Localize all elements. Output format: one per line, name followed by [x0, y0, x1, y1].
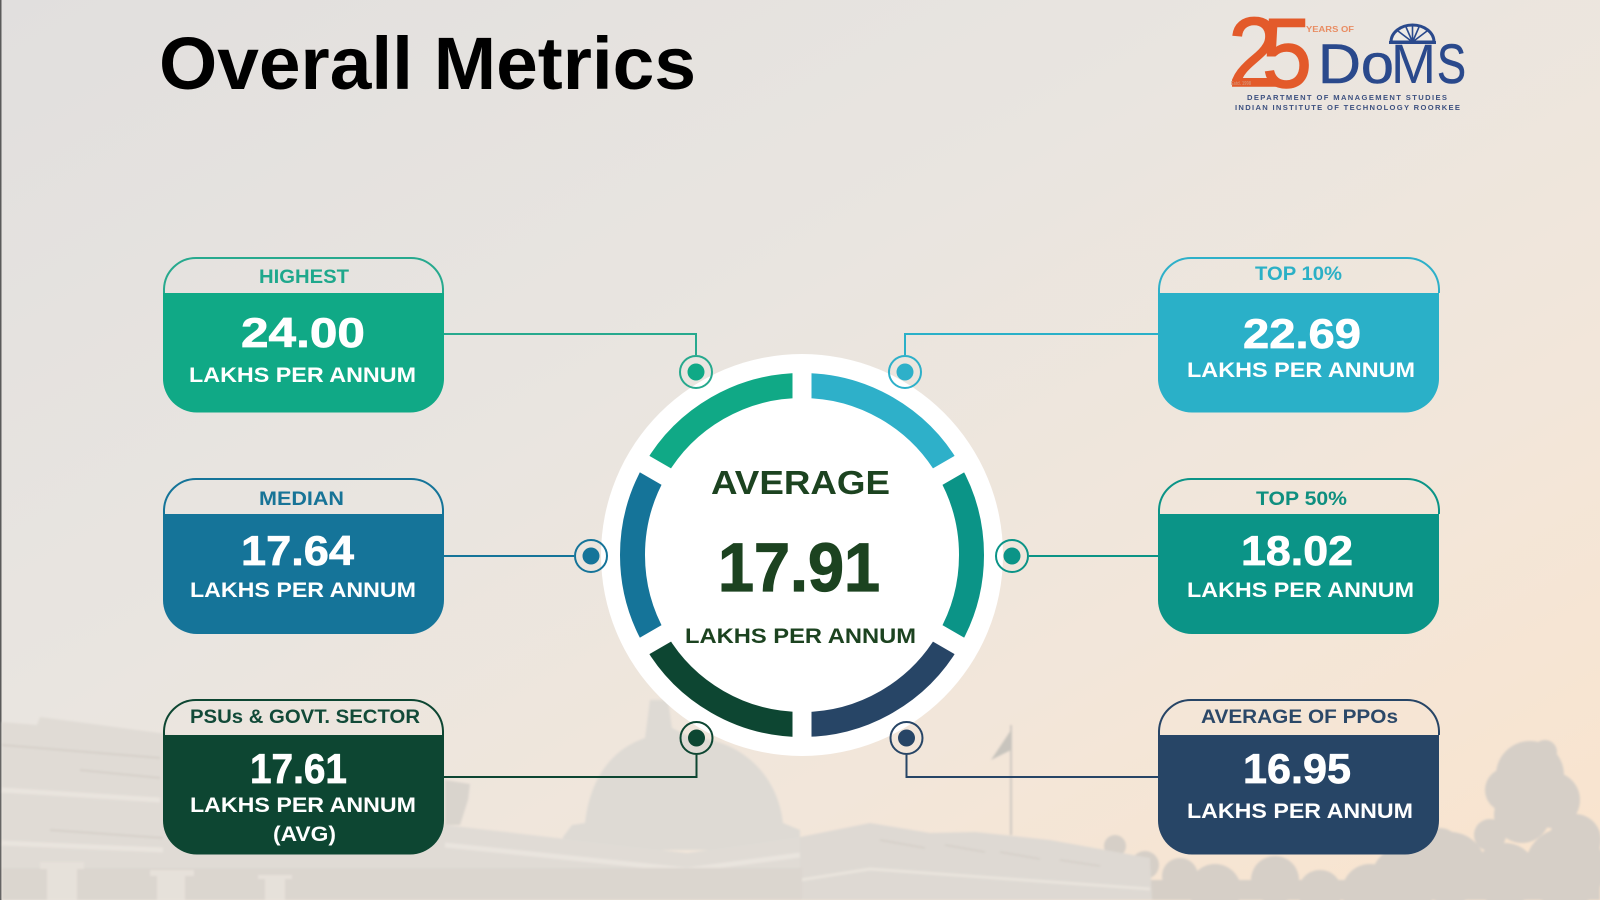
logo: 25 years of DoMS: M [1391, 32, 1436, 95]
logo: 25 years of DoMS: 2 [1228, 0, 1280, 107]
connector: PPOs [906, 755, 1158, 777]
connector: top 50% [1029, 555, 1158, 557]
unit: LAKHS PER ANNUM [1187, 579, 1414, 602]
background photo: institute building, flag and trees [2, 700, 1600, 900]
heading: PSUs & GOVT. SECTOR [190, 707, 420, 728]
logo: 25 years of DoMS: YEARS OF [1306, 25, 1354, 34]
title: Overall Metrics [159, 22, 696, 105]
segmented ring [632, 365, 972, 745]
central circle [601, 354, 1003, 756]
average value: 17.91 [718, 529, 880, 606]
dome [563, 700, 800, 850]
building right wing [800, 823, 1152, 900]
connector: PSUs [444, 755, 696, 777]
heading: MEDIAN [259, 489, 344, 510]
building left wing [2, 717, 800, 900]
panel: median [163, 479, 444, 634]
logo: 25 years of DoMS: S [1437, 32, 1466, 95]
panel: top 10% [1158, 258, 1439, 412]
node: highest [680, 356, 712, 388]
node: median [575, 540, 607, 572]
heading: AVERAGE OF PPOs [1201, 707, 1398, 728]
node: PPOs [890, 722, 922, 754]
value: 16.95 [1243, 745, 1351, 792]
value: 18.02 [1241, 527, 1353, 574]
panel: highest [163, 258, 444, 413]
unit: LAKHS PER ANNUM [189, 364, 416, 387]
average label: AVERAGE [711, 464, 890, 501]
heading: TOP 10% [1255, 264, 1342, 285]
node: top 50% [996, 540, 1028, 572]
logo: 25 years of DoMS: DEPARTMENT OF MANAGEMENT STUDIES [1247, 93, 1447, 102]
average unit: LAKHS PER ANNUM [685, 624, 916, 648]
logo: 25 years of DoMS: 5 [1262, 0, 1312, 108]
unit: LAKHS PER ANNUM [1187, 359, 1415, 382]
unit: LAKHS PER ANNUM [1187, 800, 1413, 823]
connector: top 10% [905, 334, 1158, 355]
panel: top 50% [1158, 479, 1439, 634]
node: PSUs [680, 722, 712, 754]
value: 17.64 [241, 527, 355, 574]
panel: PSUs and government sector [163, 700, 444, 854]
node: top 10% [889, 356, 921, 388]
logo: 25 years of DoMS: INDIAN INSTITUTE OF TECHNOLOGY ROORKEE [1235, 103, 1460, 112]
unit qualifier: (AVG) [273, 823, 336, 846]
value: 17.61 [250, 745, 347, 792]
heading: TOP 50% [1256, 489, 1347, 510]
pedestal [445, 780, 470, 825]
connector: median [444, 555, 574, 557]
trees [1104, 740, 1600, 900]
logo: 25 years of DoMS: Estd. 1998 [1231, 81, 1251, 87]
heading: HIGHEST [259, 267, 349, 288]
panel: average of PPOs [1158, 700, 1439, 854]
value: 24.00 [241, 309, 365, 356]
logo: 25 years of DoMS [1228, 0, 1466, 112]
value: 22.69 [1243, 310, 1361, 357]
flag [1010, 725, 1012, 835]
connector: highest [444, 334, 696, 355]
logo: 25 years of DoMS: Do [1318, 32, 1394, 95]
unit: LAKHS PER ANNUM [190, 794, 416, 817]
columns [40, 862, 292, 900]
unit: LAKHS PER ANNUM [190, 579, 416, 602]
